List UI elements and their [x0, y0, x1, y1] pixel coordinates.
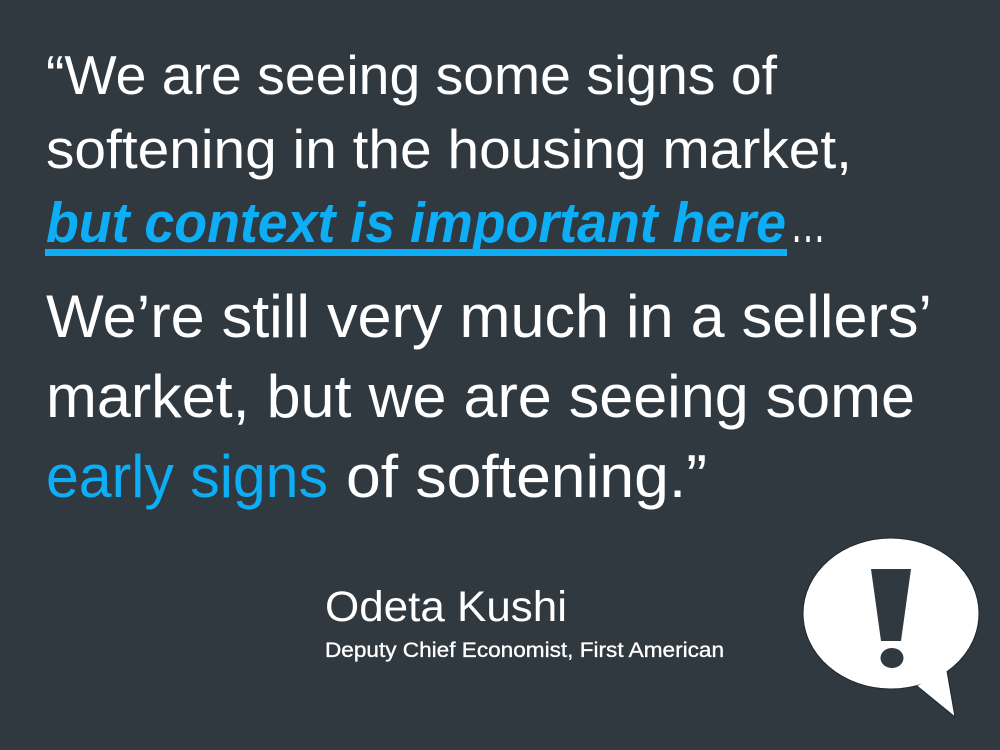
- quote: second part: We’re still very much in a sellers’: [46, 283, 932, 350]
- icon: speech bubble with exclamation mark: [803, 538, 979, 717]
- attribution: Odeta Kushi: [325, 583, 567, 631]
- quote: first part: “We are seeing some signs of: [46, 44, 778, 106]
- quote: first part: …: [790, 192, 826, 254]
- quote: second part: market, but we are seeing some: [46, 363, 915, 430]
- quote: second part: [46, 283, 932, 510]
- quote: second part: early signs: [46, 443, 328, 510]
- quote: first part: softening in the housing market,: [46, 118, 852, 180]
- quote: second part: of softening.”: [346, 443, 707, 510]
- quote: first part: but context is important here: [46, 191, 786, 255]
- attribution: Deputy Chief Economist, First American: [325, 638, 724, 662]
- quote: first part: [45, 44, 852, 256]
- attribution: [325, 583, 724, 662]
